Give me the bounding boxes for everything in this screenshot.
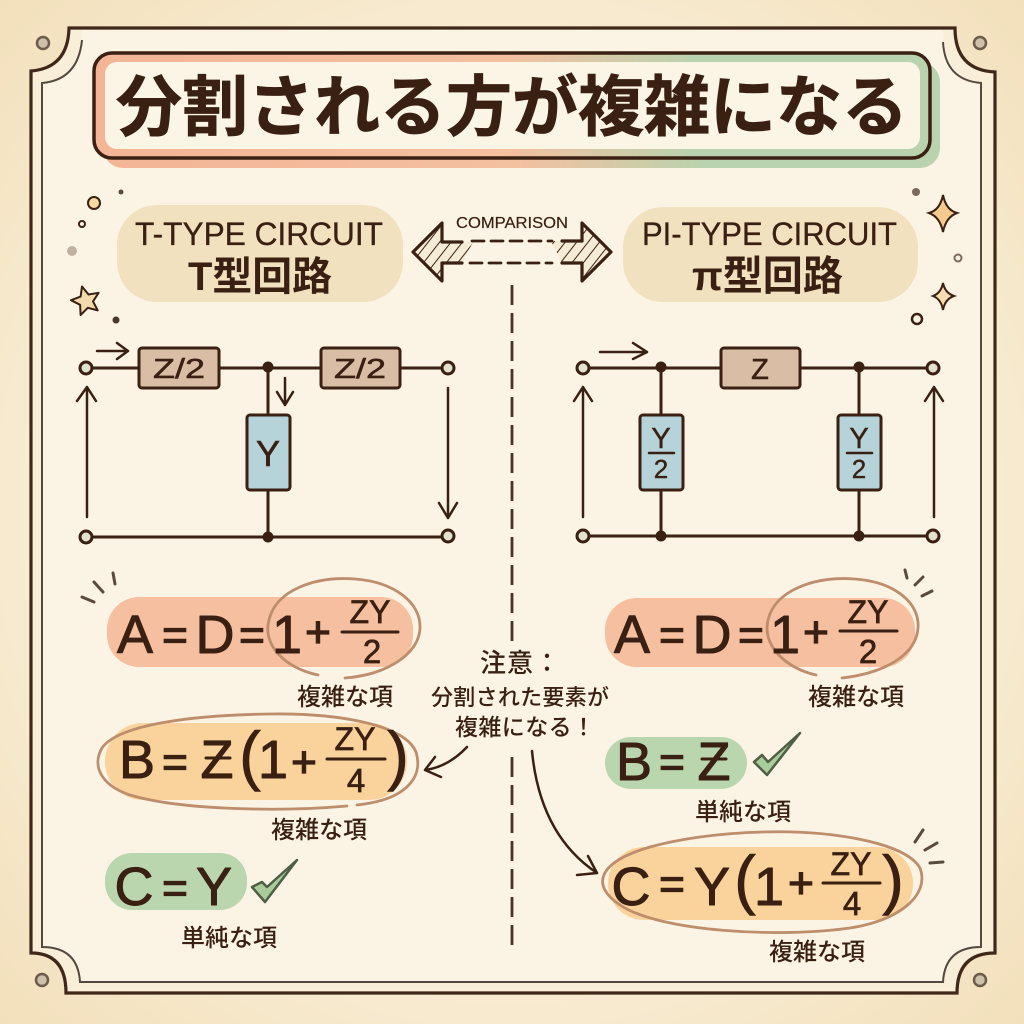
- T-type equation C: =: [162, 864, 188, 913]
- Z/2 series impedance right: Z/2: [334, 353, 386, 384]
- Pi-type equation C: ): [882, 842, 904, 916]
- caution note: 分割された要素が: [431, 685, 609, 710]
- T-type equation A=D: =: [239, 611, 265, 660]
- comparison double arrow: [413, 215, 611, 281]
- Z series impedance: Z: [751, 354, 769, 386]
- Pi-type equation C: Y: [694, 857, 730, 917]
- T-type equation B: [98, 714, 418, 809]
- heading: T-type circuit: T-TYPE CIRCUIT: [135, 216, 383, 252]
- check mark: [754, 733, 800, 775]
- caution note: [431, 648, 609, 740]
- Z series impedance: [721, 348, 800, 388]
- Y/2 shunt admittance left: Y: [651, 423, 671, 455]
- Y/2 shunt admittance right: [838, 415, 881, 490]
- Pi-type equation B: =: [659, 738, 685, 787]
- Pi-type equation A=D: +: [803, 608, 829, 657]
- caution note: 注意：: [480, 648, 560, 678]
- T-type equation B: +: [291, 738, 317, 787]
- arrow to T-type B term: [425, 747, 467, 777]
- Y/2 shunt admittance left: 2: [654, 454, 668, 484]
- T-type equation B: 1: [258, 730, 288, 790]
- Pi-type equation B: [605, 732, 800, 792]
- title banner: [93, 52, 940, 168]
- T-type equation B: (: [239, 718, 261, 792]
- Pi-type equation B: B: [616, 732, 652, 792]
- T-type equation B: =: [162, 738, 188, 787]
- Pi-type equation A=D: [605, 570, 932, 678]
- comparison double arrow: COMPARISON: [456, 215, 568, 232]
- Y/2 shunt admittance left: [640, 415, 683, 490]
- Pi-type equation A=D: 1: [770, 605, 800, 665]
- label: complex term: 複雑な項: [271, 817, 367, 844]
- Z/2 series impedance right: [321, 348, 400, 388]
- Pi-type equation A=D: =: [738, 611, 764, 660]
- Pi-type equation C: =: [659, 860, 685, 909]
- T-type circuit diagram: [77, 343, 457, 543]
- Pi-type equation C: (: [734, 842, 756, 916]
- Y/2 shunt admittance right: Y: [849, 423, 869, 455]
- T-type equation A=D: +: [305, 608, 331, 657]
- label: complex term: 複雑な項: [297, 684, 393, 711]
- heading: Pi-type circuit: π型回路: [692, 253, 843, 299]
- T-type equation A=D: A: [117, 605, 153, 665]
- heading: Pi-type circuit: [623, 207, 918, 302]
- T-type equation B: 4: [347, 762, 365, 799]
- T-type equation A=D: [82, 573, 420, 678]
- Pi-type equation A=D: A: [614, 605, 650, 665]
- Y shunt admittance: Y: [256, 433, 280, 474]
- T-type equation A=D: D: [196, 605, 234, 665]
- Y/2 shunt admittance right: 2: [852, 454, 866, 484]
- decorative stars and dots right: [912, 188, 962, 324]
- T-type equation C: [105, 853, 297, 917]
- T-type equation B: Z: [200, 730, 234, 790]
- caution note: 複雑になる！: [455, 714, 595, 740]
- Pi-type equation A=D: =: [659, 611, 685, 660]
- label: simple term: 単純な項: [695, 799, 791, 826]
- Y shunt admittance: [247, 415, 290, 490]
- Z/2 series impedance left: [139, 348, 219, 388]
- label: complex term: 複雑な項: [769, 939, 865, 966]
- heading: Pi-type circuit: PI-TYPE CIRCUIT: [642, 216, 897, 252]
- T-type equation C: C: [114, 857, 154, 917]
- decorative stars and dots left: [67, 190, 124, 324]
- T-type equation B: B: [119, 730, 155, 790]
- label: simple term: 単純な項: [181, 925, 277, 952]
- arrow to Pi-type C term: [532, 751, 597, 875]
- Pi-type equation C: C: [612, 857, 650, 917]
- Pi-type equation C: 1: [754, 857, 784, 917]
- center dashed divider: [511, 285, 513, 950]
- Pi-type circuit diagram: [574, 343, 943, 542]
- Pi-type equation C: 4: [843, 885, 861, 922]
- heading: T-type circuit: T型回路: [188, 255, 332, 299]
- Pi-type equation A=D: 2: [859, 633, 877, 670]
- T-type equation A=D: 2: [363, 633, 381, 670]
- Pi-type equation A=D: D: [692, 605, 732, 665]
- Pi-type equation A=D: ZY: [848, 594, 888, 630]
- check mark: [252, 860, 297, 902]
- T-type equation A=D: ZY: [350, 594, 390, 630]
- title banner: 分割される方が複雑になる: [116, 70, 908, 144]
- Pi-type equation C: ZY: [831, 846, 871, 882]
- T-type equation A=D: 1: [272, 605, 302, 665]
- label: complex term: 複雑な項: [808, 684, 904, 711]
- T-type equation B: ZY: [335, 721, 375, 757]
- T-type equation A=D: =: [162, 611, 188, 660]
- Pi-type equation C: [603, 830, 943, 933]
- Z/2 series impedance left: Z/2: [153, 353, 205, 384]
- T-type equation B: ): [387, 718, 409, 792]
- Pi-type equation C: +: [788, 859, 814, 908]
- T-type equation C: Y: [196, 857, 232, 917]
- heading: T-type circuit: [117, 205, 403, 302]
- Pi-type equation B: Z: [698, 732, 730, 792]
